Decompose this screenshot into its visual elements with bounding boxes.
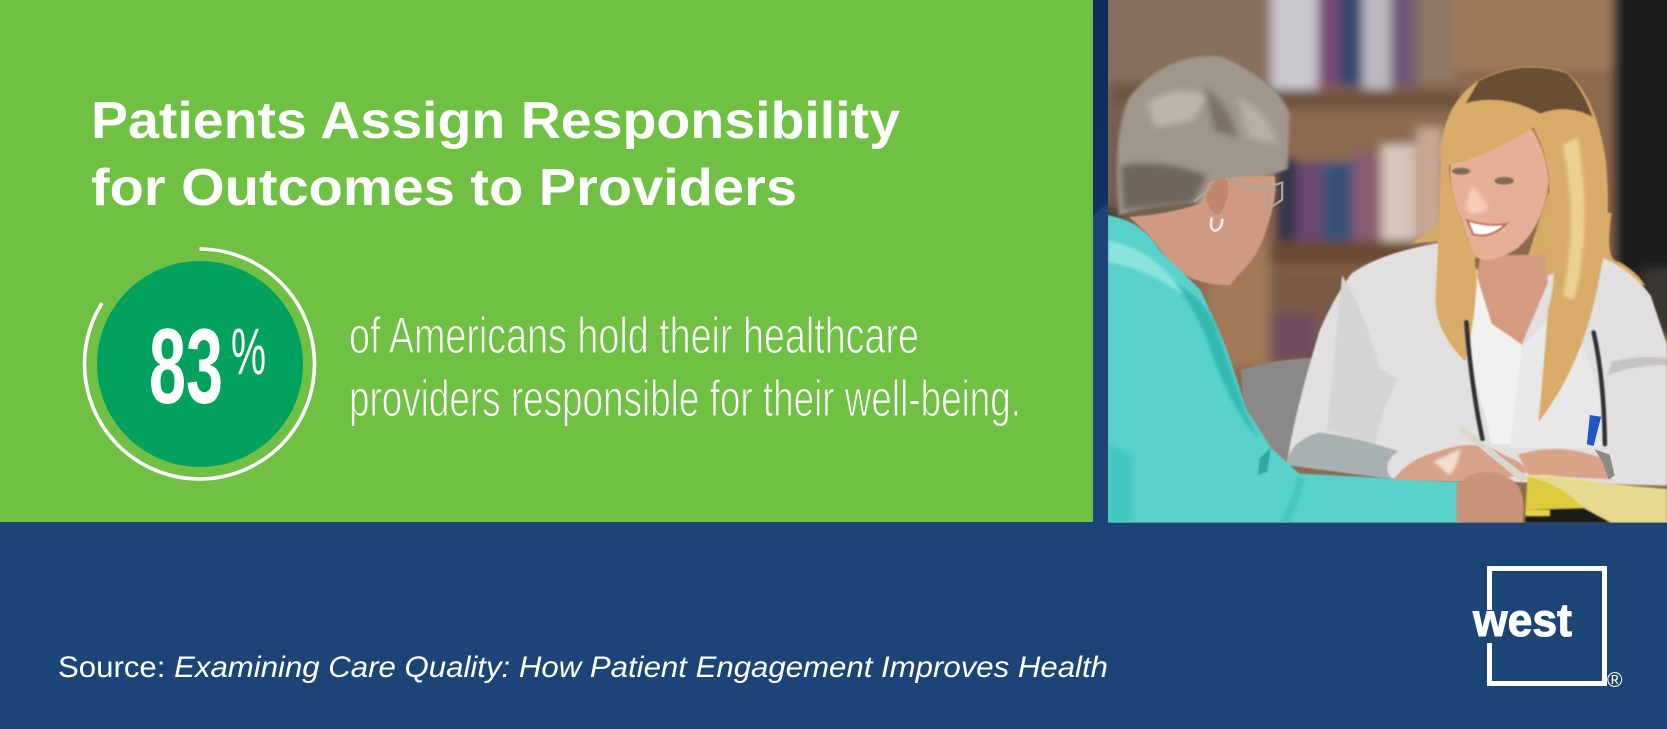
blue pen in pocket (1587, 415, 1601, 446)
filled circle (97, 261, 303, 467)
table and notepad (1525, 475, 1667, 523)
stethoscope (1466, 322, 1605, 444)
footer band (0, 522, 1667, 729)
patient: earring (1211, 218, 1222, 231)
doctor: hair behind (1410, 192, 1646, 286)
bookshelf background (1095, 0, 1667, 537)
doctor: face (1450, 127, 1549, 259)
doctor: right hand (1518, 449, 1612, 479)
stat description: providers responsible for their well-being. (349, 370, 1021, 427)
registered mark: ® (1607, 669, 1623, 692)
doctor: facial features (1452, 168, 1514, 235)
source line: Source: Examining Care Quality: How Patient Engagement Improves Health (58, 651, 1108, 684)
panel: green headline panel (0, 0, 1093, 522)
navy stripe beside photo (1093, 0, 1108, 522)
patient: hand (1456, 472, 1524, 523)
stat description: of Americans hold their healthcare (349, 307, 919, 364)
percent sign: % (231, 314, 266, 388)
patient: hair shading (1121, 86, 1278, 210)
doctor: neck (1477, 255, 1548, 344)
logo square (1490, 568, 1604, 684)
doctor: left forearm and hand (1394, 445, 1529, 482)
patient: hair (1117, 56, 1290, 215)
title: for Outcomes to Providers (91, 159, 797, 217)
chair (1240, 358, 1312, 462)
doctor: white coat (1286, 243, 1667, 486)
number: 83 (149, 306, 223, 426)
patient: glasses (1194, 181, 1282, 208)
patient: teal jacket (1102, 214, 1460, 523)
patient: face and neck (1129, 176, 1276, 285)
title (91, 92, 900, 217)
pen in hand (1458, 426, 1527, 482)
logo wordmark: west (1472, 594, 1572, 646)
watch (1595, 449, 1615, 479)
logo: west (1472, 568, 1623, 692)
photo: patient and doctor at a desk (1095, 0, 1667, 537)
stat badge: 83% (84, 249, 314, 479)
doctor: hair front (1436, 67, 1608, 422)
highlight on hand (1434, 449, 1460, 475)
stat description (349, 307, 1021, 427)
title: Patients Assign Responsibility (91, 92, 900, 150)
progress ring (84, 249, 314, 479)
patient: ear (1205, 179, 1228, 215)
